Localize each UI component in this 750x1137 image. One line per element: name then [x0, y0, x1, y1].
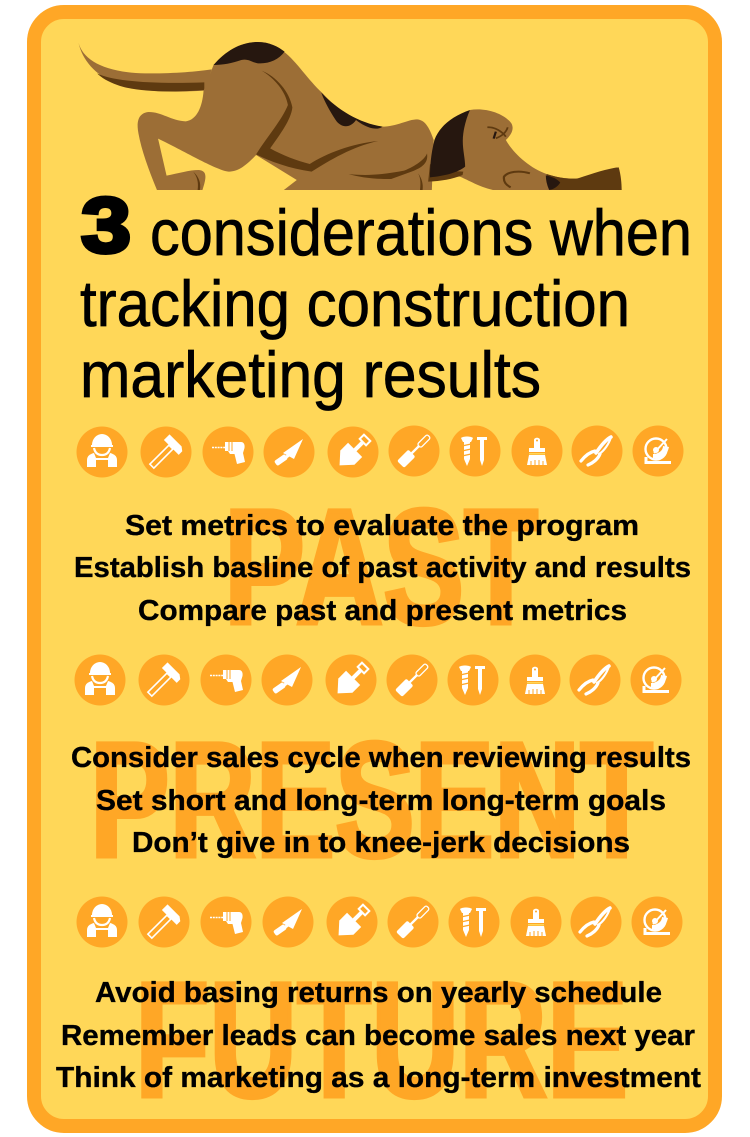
icon row: past	[76, 426, 684, 478]
past line 2: Establish basline of past activity and results	[74, 552, 691, 584]
future line 1: Avoid basing returns on yearly schedule	[95, 977, 662, 1009]
past line 3: Compare past and present metrics	[138, 595, 627, 627]
icon: pliers	[572, 426, 622, 476]
illustration: dog sniffing the ground	[78, 42, 622, 190]
icon: pliers	[570, 896, 622, 948]
icon: paint brush	[510, 654, 560, 706]
icon: measuring tape	[630, 654, 682, 706]
icon: screw and nail	[450, 426, 500, 476]
icon: paint brush	[512, 426, 562, 476]
icon row: future	[76, 896, 682, 948]
icon: screwdriver	[388, 896, 438, 948]
present line 3: Don’t give in to knee-jerk decisions	[132, 827, 630, 859]
icon: paint brush	[510, 896, 562, 948]
icon: trowel	[262, 896, 314, 948]
icon: hammer	[140, 426, 192, 478]
icon: screwdriver	[386, 654, 438, 706]
icon: construction worker	[74, 654, 126, 706]
past line 1: Set metrics to evaluate the program	[125, 510, 639, 542]
title line 1: considerations when	[150, 196, 692, 269]
icon: screwdriver	[388, 426, 440, 476]
icon: construction worker	[76, 426, 128, 478]
section: future	[56, 948, 701, 1131]
icon: trowel	[262, 654, 312, 706]
icon: screw and nail	[448, 896, 500, 948]
icon: drill	[202, 426, 254, 478]
future line 3: Think of marketing as a long-term investment	[56, 1062, 701, 1094]
ghost word: PAST: PAST	[224, 475, 538, 658]
icon: drill	[200, 654, 252, 706]
icon: shovel	[326, 896, 378, 948]
title	[80, 181, 692, 411]
icon: measuring tape	[632, 426, 684, 476]
icon: measuring tape	[632, 896, 682, 948]
icon row: present	[74, 654, 682, 706]
icon: hammer	[138, 654, 190, 706]
section: present	[71, 708, 691, 891]
icon: pliers	[570, 654, 620, 706]
icon: screw and nail	[448, 654, 498, 706]
title line 2: tracking construction	[80, 267, 630, 340]
future line 2: Remember leads can become sales next year	[61, 1020, 695, 1052]
icon: drill	[200, 896, 252, 948]
icon: trowel	[264, 426, 314, 478]
icon: hammer	[138, 896, 190, 948]
present line 1: Consider sales cycle when reviewing results	[71, 742, 691, 774]
section: past	[74, 475, 691, 658]
icon: construction worker	[76, 896, 128, 948]
icon: shovel	[328, 426, 378, 478]
icon: shovel	[326, 654, 376, 706]
present line 2: Set short and long-term long-term goals	[96, 785, 666, 817]
title numeral 3: 3	[81, 181, 131, 269]
title line 3: marketing results	[80, 338, 541, 411]
